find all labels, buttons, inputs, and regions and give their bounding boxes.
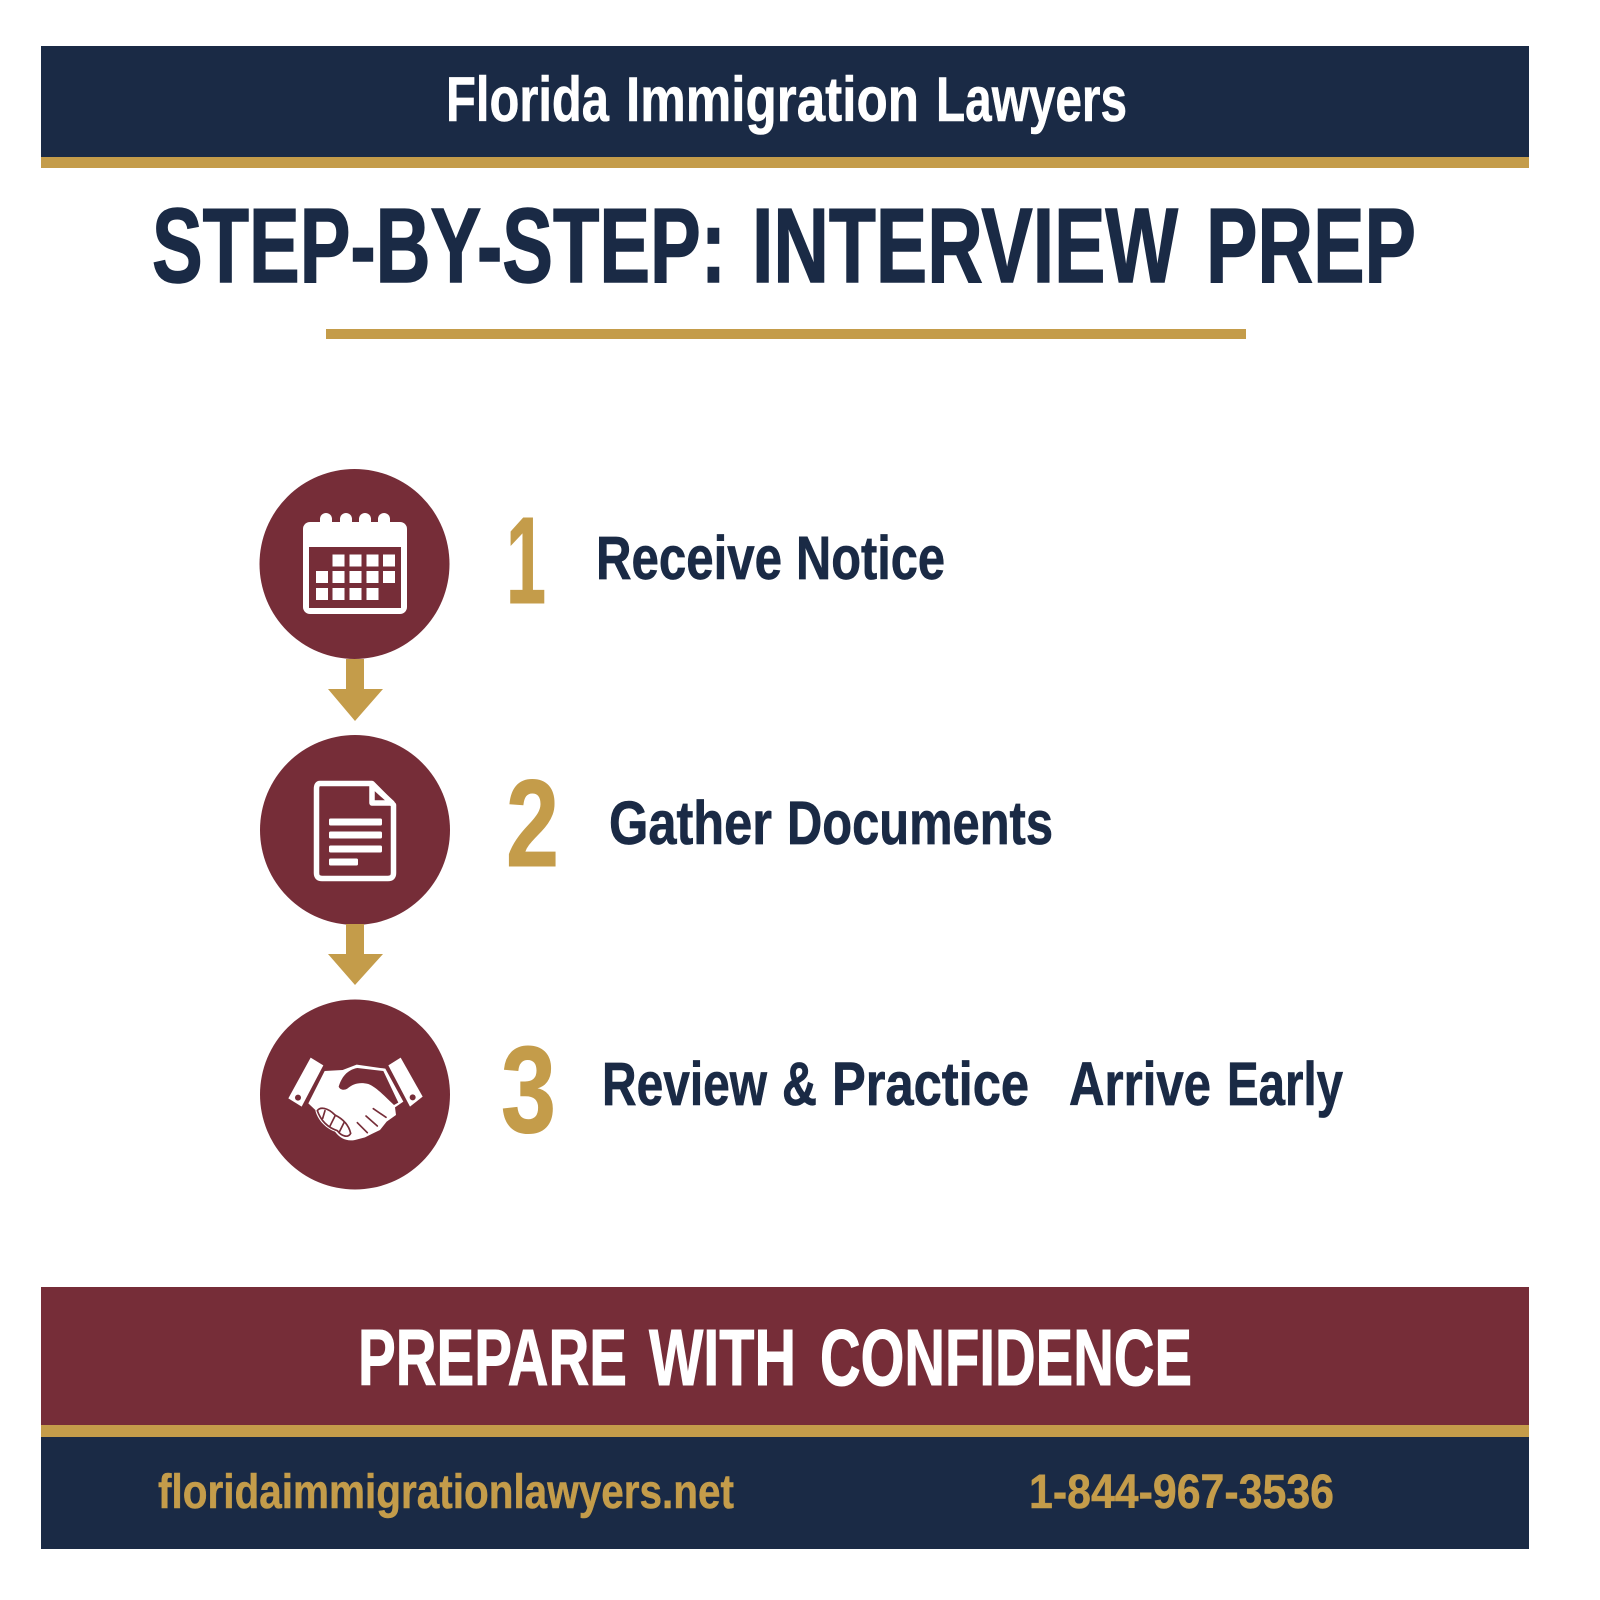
step 3 label: & [782, 1050, 817, 1118]
website: floridaimmigrationlawyers.net [158, 1466, 734, 1519]
step 2 icon: document [260, 735, 450, 925]
title: INTERVIEW [752, 187, 1178, 305]
call to action banner [41, 1287, 1529, 1425]
call to action banner: PREPARE [358, 1313, 627, 1402]
step 3 label [602, 1050, 1029, 1118]
call to action banner: CONFIDENCE [820, 1313, 1192, 1402]
header banner [41, 46, 1529, 168]
header banner: Immigration [626, 65, 919, 135]
step 3 label: Practice [832, 1050, 1029, 1118]
step 4 label: Early [1227, 1050, 1343, 1118]
title: STEP-BY-STEP: [152, 187, 726, 305]
step 1 icon: calendar [260, 469, 450, 659]
step 1 label: Notice [796, 524, 945, 592]
footer contact bar [41, 1437, 1529, 1549]
step 2 label [609, 789, 1053, 857]
title underline [326, 329, 1246, 339]
step 1 label [596, 524, 945, 592]
step 2 label: Documents [787, 789, 1053, 857]
arrow 2 to 3 [328, 924, 383, 985]
step 1 number: 1 [506, 493, 546, 630]
step 4 label: Arrive [1069, 1050, 1211, 1118]
header banner: Lawyers [936, 65, 1127, 135]
step 3 label: Review [602, 1050, 767, 1118]
step 3 icon: handshake [260, 1000, 450, 1190]
step 2 number: 2 [506, 756, 559, 893]
step 4 label [1069, 1050, 1343, 1118]
banner gold divider [41, 1425, 1529, 1437]
title [152, 187, 1416, 305]
phone: 1-844-967-3536 [1029, 1466, 1334, 1519]
header banner: Florida [446, 65, 610, 135]
arrow 1 to 2 [328, 659, 383, 721]
title: PREP [1206, 187, 1416, 305]
step 2 label: Gather [609, 789, 772, 857]
step 1 label: Receive [596, 524, 782, 592]
call to action banner: WITH [649, 1313, 796, 1402]
step 3 number: 3 [501, 1022, 556, 1159]
